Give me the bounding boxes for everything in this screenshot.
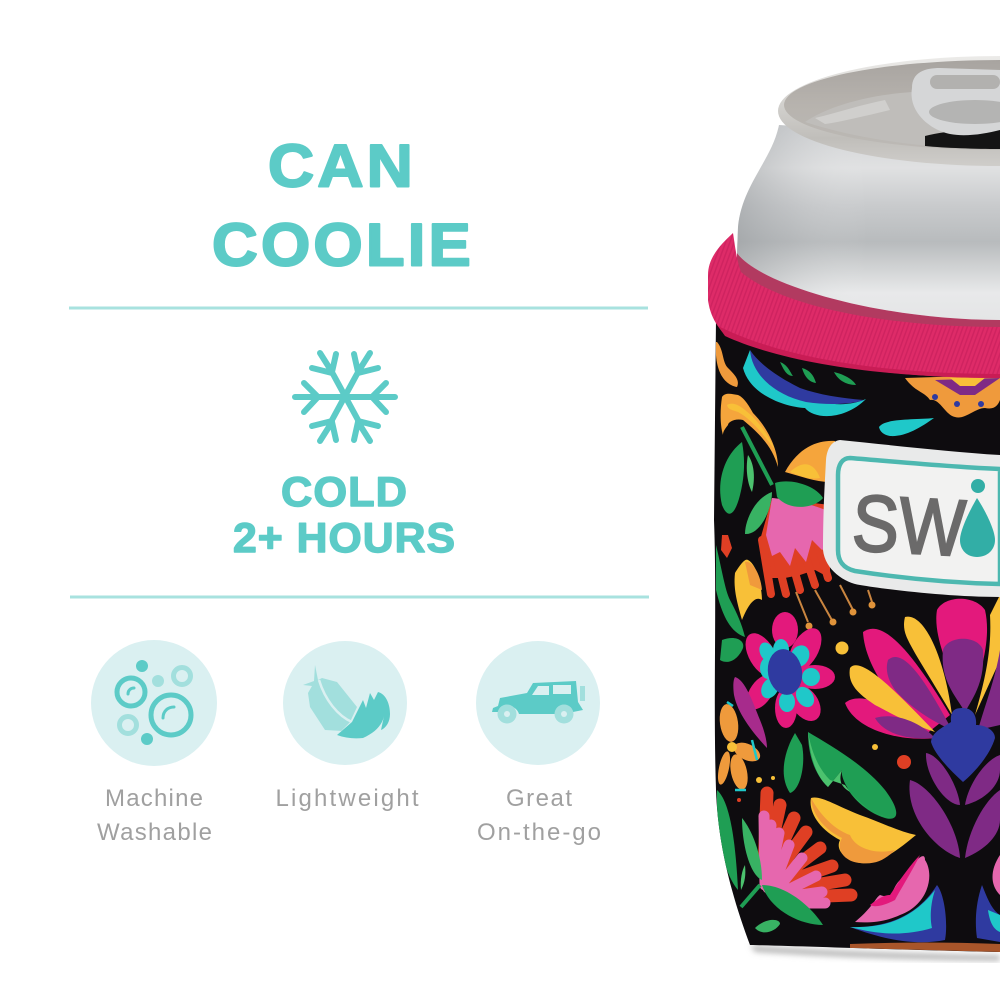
feature: great on-the-go: On-the-go xyxy=(477,819,601,846)
heading: cold 2+ hours: COLD xyxy=(281,468,408,515)
right blue motif and pink edge xyxy=(976,885,1000,942)
logo droplet xyxy=(960,498,995,557)
heading: cold 2+ hours xyxy=(233,468,456,561)
small red flower xyxy=(721,535,732,558)
coolie sleeve xyxy=(700,300,1000,960)
blue bird motif xyxy=(743,350,866,416)
pink bird xyxy=(855,856,929,922)
pink and red fuchsia xyxy=(760,498,830,594)
label: Machine xyxy=(105,785,203,812)
blue tulip xyxy=(931,708,995,782)
label: Lightweight xyxy=(276,785,419,812)
title xyxy=(212,132,474,278)
feature: machine washable xyxy=(91,640,217,846)
orange motif top left xyxy=(716,342,738,387)
small orange flower xyxy=(716,702,763,791)
bottom left green leaves xyxy=(717,790,823,932)
cyan and blue bird xyxy=(850,885,946,942)
heading: cold 2+ hours: 2+ HOURS xyxy=(233,514,456,561)
orange flower top right xyxy=(905,375,1000,417)
left yellow tulip xyxy=(735,560,762,620)
icon: feather xyxy=(283,641,407,765)
title: COOLIE xyxy=(212,212,474,278)
flower with blue centre xyxy=(739,612,835,728)
can rim and lid xyxy=(778,56,1000,166)
orange half flower xyxy=(785,441,835,482)
stem and green leaves xyxy=(720,427,823,534)
feature: machine washable: Washable xyxy=(97,819,212,846)
cyan drop xyxy=(879,418,934,436)
can body xyxy=(737,125,1000,320)
coolie collar xyxy=(708,233,1000,378)
yellow tulip xyxy=(721,394,778,467)
red and pink flower xyxy=(764,793,851,903)
small green leaves xyxy=(780,362,856,385)
stamens with dots xyxy=(796,585,876,630)
scattered dots xyxy=(737,642,911,802)
icon: jeep xyxy=(476,641,600,765)
title: CAN xyxy=(268,132,416,200)
label: Great xyxy=(506,785,572,812)
ground shadow xyxy=(750,945,1000,961)
feature: great on-the-go xyxy=(476,641,601,846)
icon: snowflake xyxy=(295,353,395,441)
purple leaf xyxy=(733,677,767,748)
big fan flower xyxy=(845,595,1000,739)
logo patch xyxy=(823,440,1000,597)
product: can in coolie xyxy=(700,56,1000,961)
logo lettering: SW xyxy=(850,478,968,573)
yellow bird xyxy=(811,797,916,863)
icon: bubbles xyxy=(91,640,217,766)
purple leaves xyxy=(909,753,1000,858)
green leaves centre xyxy=(784,732,896,819)
bottom seam pattern xyxy=(850,942,1000,952)
feature: lightweight xyxy=(276,641,419,812)
long green leaf xyxy=(716,545,745,637)
